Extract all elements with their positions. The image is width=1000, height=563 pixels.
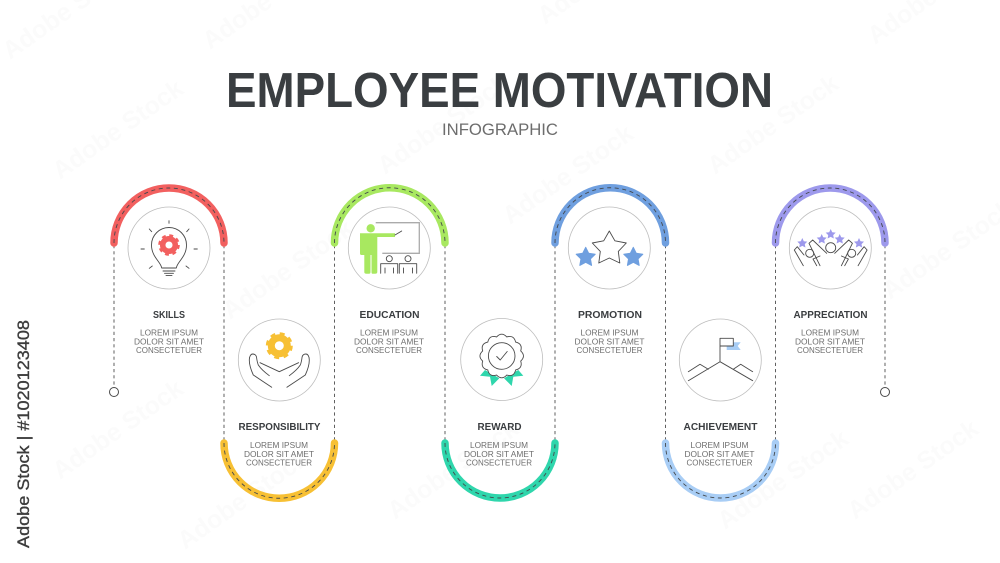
text: skills (134, 328, 204, 355)
arc: promotion (555, 188, 666, 243)
heading: reward: REWARD (478, 421, 522, 433)
arc: responsibility (224, 443, 334, 498)
text: responsibility (244, 441, 314, 468)
text: skills: CONSECTETUER (136, 346, 202, 355)
text: skills: LOREM IPSUM (140, 328, 198, 338)
icon: three stars (568, 207, 650, 289)
panel: reward (445, 318, 555, 498)
text: appreciation: LOREM IPSUM (801, 328, 859, 338)
background watermark: Adobe Stock (497, 119, 639, 230)
stock credit: Adobe Stock | #1020123408 (14, 320, 33, 548)
background watermark: Adobe Stock (47, 74, 189, 185)
background watermark: Adobe Stock (47, 374, 189, 485)
text: education: DOLOR SIT AMET (354, 337, 424, 346)
icon: hands holding gear (238, 319, 320, 401)
text: reward: DOLOR SIT AMET (464, 450, 534, 459)
icon: light bulb with gear (128, 207, 210, 289)
connector lines (110, 245, 890, 441)
arc: achievement (666, 443, 776, 498)
text: education (354, 328, 424, 355)
arc: reward (445, 443, 555, 498)
text: promotion: LOREM IPSUM (580, 328, 639, 338)
panel: skills (114, 188, 224, 355)
text: education: CONSECTETUER (356, 346, 422, 355)
icon: award badge (461, 318, 543, 400)
text: reward (464, 441, 534, 468)
panel: responsibility (224, 319, 334, 498)
text: responsibility: DOLOR SIT AMET (244, 450, 314, 459)
text: skills: DOLOR SIT AMET (134, 337, 204, 346)
background watermark: Adobe Stock (842, 414, 984, 525)
text: reward: LOREM IPSUM (470, 441, 528, 450)
text: promotion: CONSECTETUER (576, 346, 643, 355)
icon: flag on mountain (679, 319, 761, 401)
text: achievement: DOLOR SIT AMET (684, 450, 755, 459)
text: appreciation: CONSECTETUER (797, 346, 863, 355)
subtitle: INFOGRAPHIC (442, 120, 558, 139)
text: reward: CONSECTETUER (466, 459, 532, 468)
text: responsibility: LOREM IPSUM (250, 441, 308, 450)
arc: education (334, 188, 445, 243)
background watermark: Adobe Stock (702, 69, 844, 180)
heading: responsibility: RESPONSIBILITY (238, 421, 320, 433)
heading: promotion: PROMOTION (578, 309, 642, 321)
title: EMPLOYEE MOTIVATION (226, 64, 773, 118)
panel: achievement (666, 319, 776, 498)
panel: education (334, 188, 445, 355)
text: achievement: LOREM IPSUM (690, 441, 749, 450)
background watermark: Adobe Stock (372, 69, 514, 180)
arc: appreciation (776, 188, 885, 243)
heading: education: EDUCATION (360, 309, 420, 321)
text: promotion (574, 328, 645, 355)
text: appreciation: DOLOR SIT AMET (795, 337, 865, 346)
text: appreciation (795, 328, 865, 355)
background watermark: Adobe Stock (217, 214, 359, 325)
panel: appreciation (776, 188, 885, 355)
heading: achievement: ACHIEVEMENT (684, 421, 758, 433)
text: responsibility: CONSECTETUER (246, 459, 312, 468)
heading: appreciation: APPRECIATION (794, 309, 868, 321)
panel: promotion (555, 188, 666, 355)
background watermark: Adobe Stock (712, 424, 854, 535)
heading: skills: SKILLS (153, 309, 185, 321)
text: promotion: DOLOR SIT AMET (574, 337, 645, 346)
icon: cheering people with stars (789, 207, 871, 289)
icon: teacher at board (348, 207, 430, 289)
background watermark: Adobe Stock (172, 444, 314, 555)
text: achievement: CONSECTETUER (686, 459, 753, 468)
text: education: LOREM IPSUM (360, 328, 418, 338)
arc: skills (114, 188, 224, 243)
background watermark: Adobe Stock (382, 414, 524, 525)
text: achievement (684, 441, 755, 468)
